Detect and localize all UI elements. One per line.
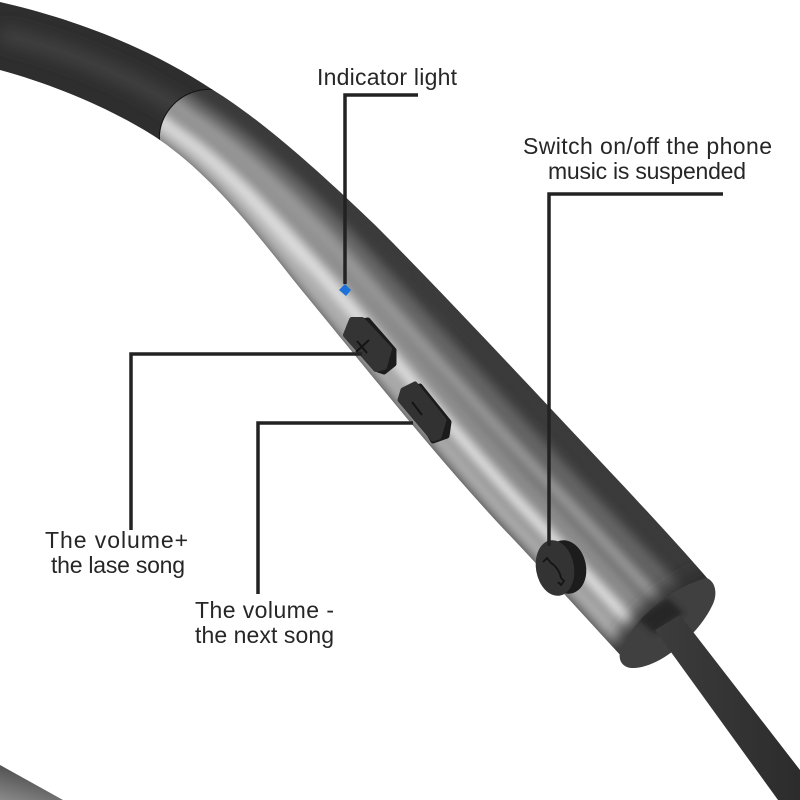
cable xyxy=(655,615,800,800)
label: switch on/off: music is suspended xyxy=(548,158,746,184)
lower neckband fragment xyxy=(0,765,63,800)
label: volume plus: The volume+ xyxy=(45,527,188,553)
icon: plus xyxy=(356,340,369,353)
volume plus button xyxy=(346,320,394,372)
label: indicator light: Indicator light xyxy=(317,64,458,90)
label: volume minus: the next song xyxy=(195,622,334,648)
leader line: volume plus xyxy=(131,354,362,530)
phone switch button xyxy=(531,536,591,599)
metal control housing xyxy=(160,90,707,654)
volume minus button xyxy=(400,384,449,441)
leader line: indicator light xyxy=(345,95,418,284)
label: switch on/off xyxy=(523,133,772,184)
label: volume minus: The volume - xyxy=(195,597,334,623)
icon: minus xyxy=(412,402,422,415)
rubber neckband xyxy=(0,2,213,140)
label: volume plus: the lase song xyxy=(51,552,185,578)
leader line: switch button xyxy=(549,194,723,546)
indicator light xyxy=(339,284,351,296)
label: switch on/off: Switch on/off the phone xyxy=(523,133,772,159)
end cap xyxy=(620,578,716,668)
leader line: volume minus xyxy=(258,423,413,594)
icon: phone handset xyxy=(543,558,564,585)
label: volume minus xyxy=(195,597,334,648)
label: volume plus xyxy=(45,527,188,578)
